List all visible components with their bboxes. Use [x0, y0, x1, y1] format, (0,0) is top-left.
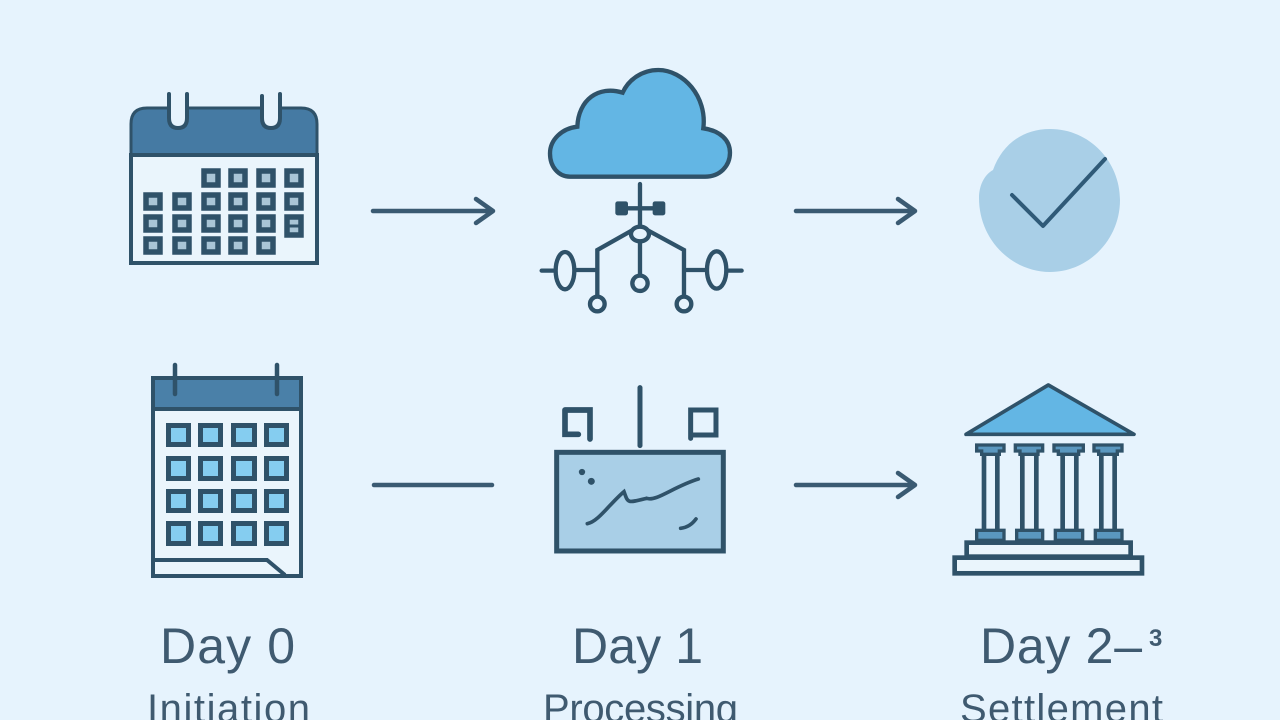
icon: bank building with columns — [955, 385, 1142, 573]
label: Day 1 Processing — [543, 618, 738, 720]
label: Day 2-3 Settlement: Day 2– — [980, 618, 1142, 674]
label: Day 1 Processing: Day 1 — [572, 618, 703, 674]
arrow: bottom row, panel to bank — [796, 473, 915, 497]
icon: framed panel with signature line — [557, 388, 723, 551]
icon: wall calendar with rings — [131, 94, 317, 263]
label: Day 0 Initiation — [147, 618, 310, 720]
connector line: bottom row, calendar to panel — [374, 483, 492, 487]
label: Day 0 Initiation: Day 0 — [160, 618, 295, 674]
icon: tall calendar with grid — [153, 365, 301, 576]
arrow: top row, cloud to check — [796, 199, 915, 223]
icon: cloud with network tree — [542, 70, 742, 311]
label: Day 2-3 Settlement — [960, 618, 1163, 720]
icon: check mark in circle — [979, 129, 1120, 272]
label: Day 2-3 Settlement: 3 — [1149, 625, 1162, 652]
arrow: top row, calendar to cloud — [373, 199, 493, 223]
